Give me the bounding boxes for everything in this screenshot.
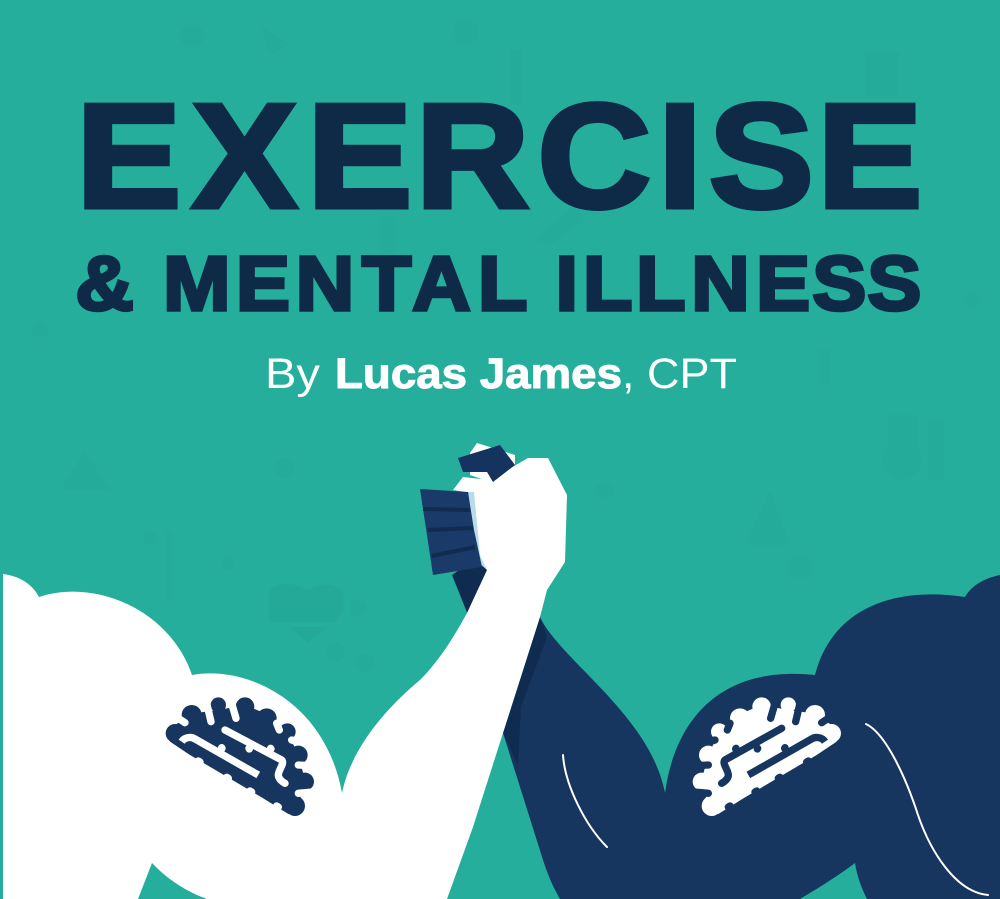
title: EXERCISE: EXERCISE	[76, 74, 922, 239]
navy hand behind fist	[452, 557, 490, 615]
byline: Lucas James	[335, 350, 622, 398]
byline: By	[265, 350, 321, 398]
fist shadow	[468, 492, 487, 570]
byline	[265, 350, 737, 398]
arm shadow	[503, 617, 547, 765]
byline: , CPT	[622, 350, 737, 398]
thumb	[458, 443, 515, 482]
white arm	[3, 458, 567, 899]
icon: navy brain on white arm	[166, 697, 317, 816]
wrist wrap	[420, 489, 482, 575]
muscle line: shoulder	[866, 724, 988, 895]
subtitle: & MENTAL ILLNESS: & MENTAL ILLNESS	[75, 241, 921, 327]
icon: white brain on navy arm	[690, 697, 841, 816]
navy arm	[503, 575, 1000, 899]
muscle line: forearm	[563, 755, 607, 847]
